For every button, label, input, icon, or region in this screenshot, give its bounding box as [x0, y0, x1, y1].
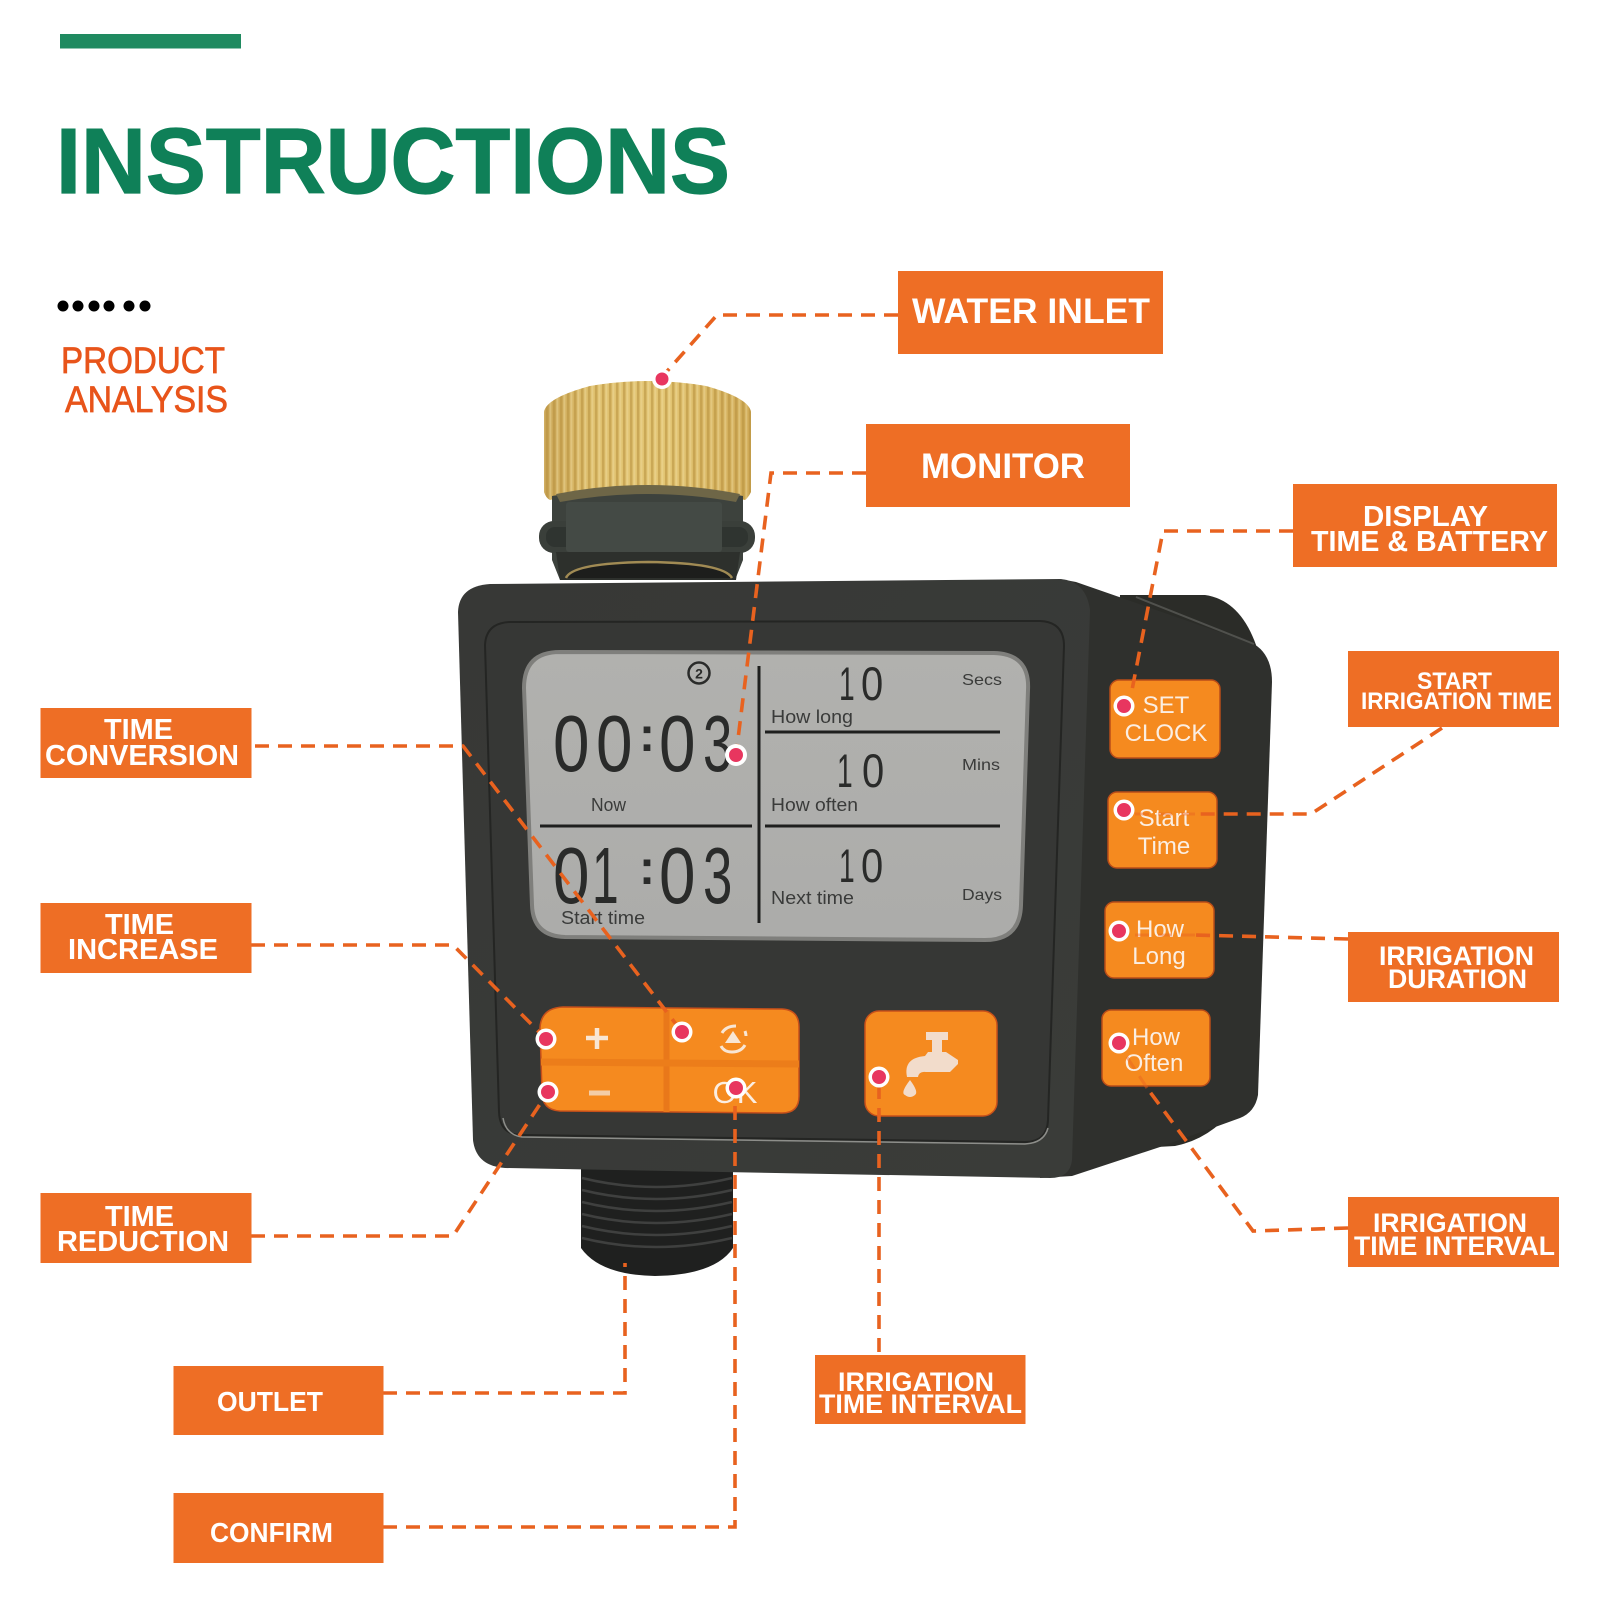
now time reading: :: [639, 709, 655, 762]
bezel lower highlight: [503, 1118, 1048, 1144]
screen captions: How often: [771, 795, 858, 815]
start time reading: :: [639, 842, 655, 895]
label: irrigation duration: IRRIGATION: [1379, 941, 1534, 971]
side button: how often: [1102, 1010, 1210, 1086]
green accent bar: [60, 34, 241, 48]
threaded outlet: [581, 1165, 733, 1276]
OK text: OK: [713, 1075, 758, 1110]
label: irrigation time interval right: [1348, 1197, 1559, 1267]
label: irrigation time interval bottom: [815, 1355, 1026, 1424]
label: time conversion: [40, 708, 252, 778]
leader: display time and battery: [1114, 531, 1293, 716]
leader: time increase: [251, 945, 556, 1050]
cycle number symbol: [688, 662, 710, 684]
now time reading: 3: [703, 700, 732, 789]
LCD screen: [524, 652, 1028, 940]
label: irrigation time interval right: TIME INTERVAL: [1354, 1231, 1555, 1261]
leader: irrigation time interval right: [1108, 1032, 1348, 1231]
label: time reduction: TIME: [105, 1201, 174, 1233]
label: time increase: TIME: [105, 909, 174, 941]
screen captions: Now: [591, 795, 627, 815]
label: display time and battery: [1293, 484, 1557, 567]
label: start irrigation time: IRRIGATION TIME: [1361, 688, 1552, 715]
label: water inlet: WATER INLET: [912, 292, 1150, 331]
minus symbol: [589, 1090, 610, 1096]
leader: confirm: [383, 1078, 746, 1527]
screen captions: How long: [771, 707, 853, 727]
screen captions: Days: [962, 887, 1002, 904]
title: INSTRUCTIONS: [56, 109, 730, 213]
side button: how long: How: [1136, 916, 1185, 943]
label: monitor: MONITOR: [921, 447, 1085, 486]
how long value: 1: [839, 659, 855, 711]
side button: how long: [1105, 902, 1214, 978]
next time value: 0: [861, 841, 883, 893]
side button: start time: [1108, 792, 1217, 868]
main control button cluster: [540, 1007, 799, 1113]
label: time reduction: REDUCTION: [57, 1226, 229, 1258]
side button: how long: Long: [1132, 943, 1186, 970]
inlet collar: [539, 485, 755, 580]
subtitle: product analysis: PRODUCT: [61, 340, 225, 381]
label: irrigation duration: [1348, 932, 1559, 1002]
decorative black dots: [58, 300, 150, 312]
label: start irrigation time: START: [1417, 668, 1492, 695]
now time reading: 0: [596, 699, 632, 788]
screen captions: Next time: [771, 888, 854, 908]
how often value: 0: [862, 746, 884, 798]
how long value: [839, 659, 883, 711]
label: display time and battery: DISPLAY: [1363, 501, 1488, 533]
label: time increase: [40, 903, 252, 973]
mode rotate symbol: [721, 1026, 746, 1052]
label: time conversion: TIME: [104, 714, 173, 746]
label: irrigation time interval right: IRRIGATION: [1373, 1208, 1527, 1238]
screen divider lines: [540, 666, 1000, 923]
start time reading: [553, 830, 732, 921]
inner bezel: [485, 621, 1064, 1142]
now time reading: 0: [659, 699, 695, 788]
side button: start time: Time: [1138, 833, 1190, 860]
how often value: 1: [837, 746, 853, 798]
now time reading: [553, 699, 732, 789]
label: water inlet: [898, 271, 1163, 354]
leader: time reduction: [251, 1082, 558, 1236]
side highlight edge: [1136, 597, 1254, 644]
icon: faucet and drop: [903, 1032, 958, 1097]
label: outlet: [174, 1366, 384, 1435]
leader: start irrigation time: [1114, 728, 1442, 820]
now time reading: 0: [553, 699, 589, 788]
side button: set clock: SET: [1143, 692, 1190, 719]
cycle number symbol: 2: [695, 666, 703, 682]
start time reading: 3: [703, 832, 732, 921]
label: confirm: [174, 1493, 384, 1563]
plus symbol: [586, 1028, 608, 1049]
front face: [458, 579, 1090, 1178]
label: outlet: OUTLET: [217, 1386, 323, 1417]
screen captions: Secs: [962, 672, 1002, 689]
side button: start time: Start: [1139, 805, 1190, 832]
side button: set clock: [1110, 680, 1220, 758]
leader: time conversion: [255, 746, 692, 1042]
leader: monitor: [725, 473, 866, 766]
screen captions: Mins: [962, 757, 1000, 774]
label: time increase: INCREASE: [68, 934, 218, 966]
leader: irrigation duration: [1108, 920, 1348, 942]
label: time conversion: CONVERSION: [45, 740, 239, 772]
label: irrigation duration: DURATION: [1388, 964, 1527, 994]
label: irrigation time interval bottom: IRRIGATION: [838, 1367, 994, 1397]
leader: irrigation time interval bottom: [868, 1066, 890, 1352]
label: monitor: [866, 424, 1130, 507]
label: start irrigation time: [1348, 651, 1559, 727]
device: irrigation timer: [458, 381, 1272, 1276]
brass water inlet nut: [544, 381, 751, 500]
label: confirm: CONFIRM: [210, 1517, 333, 1548]
label: time reduction: [40, 1193, 252, 1263]
side housing: [1040, 579, 1272, 1178]
subtitle: product analysis: [61, 340, 228, 420]
leader: water inlet: [652, 315, 898, 389]
side button: set clock: CLOCK: [1125, 720, 1207, 747]
how long value: 0: [861, 659, 883, 711]
label: irrigation time interval bottom: TIME INTERVAL: [819, 1389, 1022, 1419]
screen captions: [561, 672, 1002, 928]
how often value: [837, 746, 884, 798]
screen captions: Start time: [561, 908, 645, 928]
side button: how often: How: [1132, 1024, 1181, 1051]
subtitle: product analysis: ANALYSIS: [65, 379, 228, 420]
start time reading: 1: [592, 830, 619, 920]
leader: outlet: [383, 1263, 625, 1393]
start time reading: 0: [553, 831, 589, 920]
label: display time and battery: TIME & BATTERY: [1311, 526, 1548, 558]
next time value: [839, 841, 883, 893]
start time reading: 0: [659, 831, 695, 920]
rear housing bump: [1100, 595, 1256, 1150]
side button: how often: Often: [1125, 1050, 1183, 1077]
water tap button: [865, 1011, 997, 1116]
next time value: 1: [839, 841, 855, 893]
